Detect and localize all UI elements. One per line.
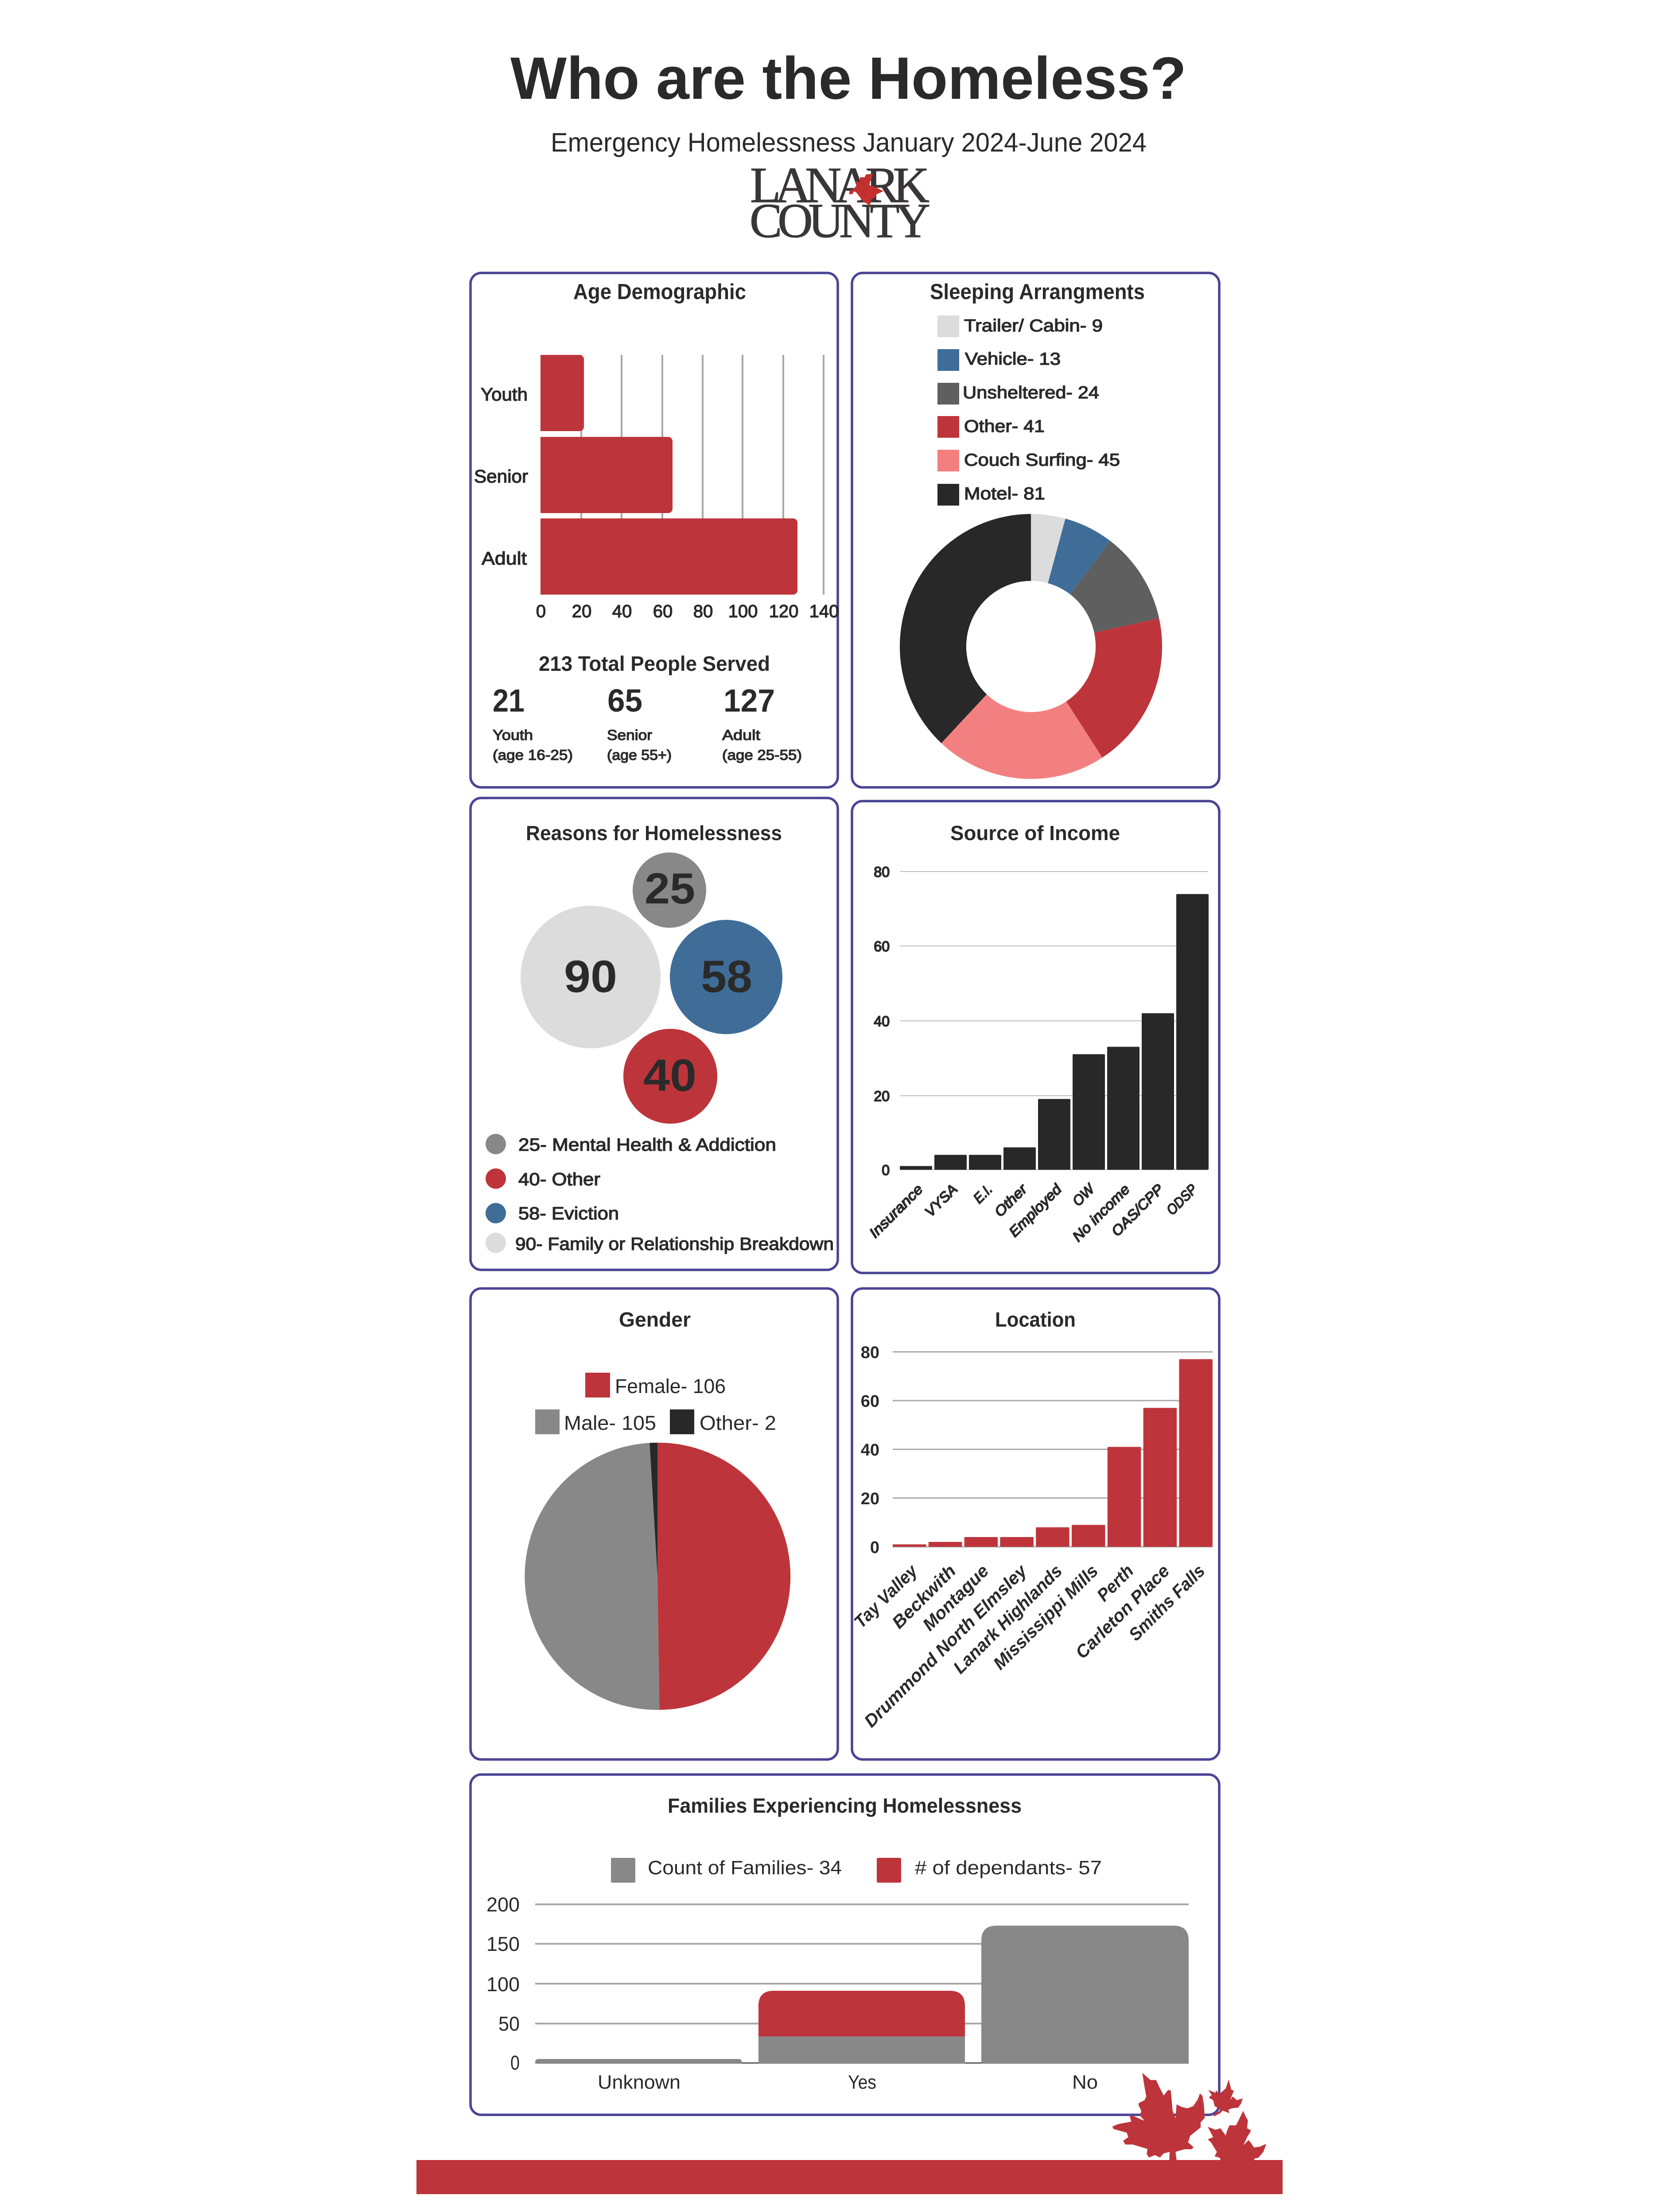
bar chart: income: 40: [874, 1013, 890, 1029]
donut chart: sleeping: [900, 514, 1162, 779]
heading: gender: Gender: [619, 1308, 691, 1331]
heading: sleeping arrangements: Sleeping Arrangments: [930, 280, 1145, 304]
stacked bar chart: families: [486, 1893, 1189, 2093]
bar chart: age: 120: [769, 602, 798, 621]
icon: maple leaves: [1112, 2073, 1266, 2162]
panel: age demographic: [471, 273, 839, 787]
heading: reasons: Reasons for Homelessness: [526, 821, 782, 845]
stat: adult: (age 25-55): [722, 747, 802, 763]
stat: youth: 21: [493, 683, 525, 719]
bubble: 25: 25: [645, 864, 695, 913]
bar chart: location: 40: [861, 1441, 879, 1460]
panel: sleeping arrangements: [852, 273, 1219, 787]
bubble: 25: [633, 852, 706, 928]
bar chart: location: Montague: [919, 1561, 992, 1635]
stacked bar chart: families: 100: [486, 1973, 520, 1996]
bar chart: location: Perth: [1093, 1561, 1137, 1605]
bar chart: income: 20: [874, 1088, 890, 1104]
stat: senior: Senior: [607, 727, 652, 743]
legend: reasons: 40- Other: [518, 1170, 600, 1189]
bar chart: age: 0: [536, 602, 546, 621]
bar chart: age: 140: [809, 602, 839, 621]
legend: sleeping: Motel- 81: [964, 484, 1045, 503]
bar chart: location: Lanark Highlands: [949, 1561, 1066, 1678]
bar chart: location: 0: [870, 1538, 879, 1557]
bar chart: location: Smiths Falls: [1125, 1561, 1209, 1645]
stacked bar chart: families: No: [1072, 2071, 1098, 2093]
heading: source of income: Source of Income: [950, 821, 1120, 845]
bubble: 90: [521, 906, 661, 1048]
bar chart: income: Insurance: [866, 1181, 926, 1241]
panel: source of income: [852, 801, 1219, 1273]
stat: adult: Adult: [722, 727, 760, 743]
legend: families: # of dependants- 57: [915, 1857, 1102, 1879]
bar chart: location: Tay Valley: [851, 1561, 922, 1632]
bubble: 40: 40: [643, 1050, 696, 1101]
legend: sleeping: Vehicle- 13: [965, 350, 1061, 369]
bubble: 40: [623, 1029, 717, 1124]
bar chart: location: 80: [861, 1343, 879, 1362]
panel: gender: [471, 1288, 838, 1759]
title: Who are the Homeless?: [510, 45, 1186, 112]
stacked bar chart: families: Yes: [848, 2071, 876, 2093]
legend: reasons: 25- Mental Health & Addiction: [518, 1135, 776, 1155]
bubble: 58: [670, 920, 782, 1034]
bar chart: age: 20: [572, 602, 591, 621]
bar chart: income: OAS/CPP: [1108, 1181, 1167, 1239]
stat: adult: [722, 683, 802, 763]
bar chart: location: Carleton Place: [1072, 1561, 1173, 1662]
bar chart: income: Other: [991, 1180, 1031, 1220]
panel: reasons for homelessness: [471, 798, 838, 1270]
bar chart: location: 60: [861, 1392, 879, 1411]
stat: senior: 65: [607, 683, 642, 719]
bar chart: location: Drummond North Elmsley: [860, 1561, 1031, 1731]
legend: sleeping: Unsheltered- 24: [963, 383, 1099, 402]
bar chart: location: [851, 1343, 1213, 1731]
bar chart: income: 0: [882, 1162, 890, 1178]
stat: senior: (age 55+): [607, 747, 672, 763]
heading: age demographic: Age Demographic: [573, 280, 746, 304]
bar chart: income: OW: [1069, 1180, 1098, 1209]
stacked bar chart: families: 150: [486, 1933, 520, 1955]
bubble: 90: 90: [564, 951, 617, 1002]
logo: Lanark County: [750, 157, 930, 248]
bar chart: age: 60: [653, 602, 673, 621]
footer band: [416, 2160, 1283, 2194]
legend: sleeping: Couch Surfing- 45: [964, 451, 1120, 470]
stacked bar chart: families: 0: [510, 2051, 520, 2074]
heading: location: Location: [995, 1308, 1076, 1331]
legend: gender: Male- 105: [564, 1412, 656, 1434]
bar chart: income: VYSA: [922, 1181, 961, 1220]
stat: adult: 127: [723, 683, 775, 719]
logo: Lanark County: COUNTY: [750, 194, 930, 248]
stat: youth: Youth: [493, 727, 533, 743]
stat: youth: [493, 683, 573, 763]
bar chart: age: Senior: [474, 466, 528, 487]
bar chart: age: [474, 355, 839, 621]
bar chart: income: 60: [874, 938, 890, 954]
bar chart: income: Employed: [1006, 1181, 1065, 1240]
bar chart: age: Youth: [481, 384, 528, 405]
legend: families: Count of Families- 34: [648, 1857, 842, 1879]
bubble: 58: 58: [701, 951, 752, 1002]
stacked bar chart: families: 200: [486, 1893, 520, 1916]
bar chart: age: Adult: [482, 548, 527, 568]
heading: families: Families Experiencing Homelessness: [668, 1794, 1022, 1817]
legend: reasons: 90- Family or Relationship Breakdown: [515, 1234, 834, 1254]
bar chart: income: E.I.: [970, 1181, 996, 1207]
bar chart: income: ODSP: [1163, 1181, 1200, 1218]
stacked bar chart: families: 50: [498, 2012, 520, 2035]
logo: Lanark County: LANARK: [750, 157, 929, 213]
bar chart: income: 80: [874, 864, 890, 880]
total people served: 213 Total People Served: [539, 652, 770, 675]
legend: sleeping: Other- 41: [964, 417, 1045, 436]
bar chart: age: 40: [612, 602, 632, 621]
legend: reasons: 58- Eviction: [518, 1204, 619, 1223]
legend: gender: Other- 2: [700, 1412, 776, 1434]
bar chart: income: No income: [1069, 1181, 1133, 1245]
pie chart: gender: [525, 1443, 790, 1710]
legend: sleeping: Trailer/ Cabin- 9: [964, 316, 1103, 335]
stacked bar chart: families: Unknown: [598, 2071, 681, 2093]
legend: reasons: [486, 1134, 834, 1254]
stat: senior: [607, 683, 672, 763]
legend: families: [611, 1857, 1102, 1883]
bar chart: location: Mississippi Mills: [990, 1561, 1102, 1674]
panel: families experiencing homelessness: [471, 1775, 1219, 2115]
panel: location: [851, 1288, 1219, 1759]
bar chart: age: 100: [728, 602, 758, 621]
legend: gender: Female- 106: [615, 1375, 726, 1397]
legend: gender: [535, 1373, 776, 1434]
bar chart: age: 80: [693, 602, 713, 621]
bar chart: income: [866, 864, 1209, 1245]
bar chart: location: Beckwith: [888, 1561, 960, 1632]
stat: youth: (age 16-25): [493, 747, 573, 763]
bar chart: location: 20: [861, 1490, 879, 1508]
legend: sleeping: [937, 315, 1120, 506]
subtitle: Emergency Homelessness January 2024-June 2024: [551, 128, 1147, 157]
